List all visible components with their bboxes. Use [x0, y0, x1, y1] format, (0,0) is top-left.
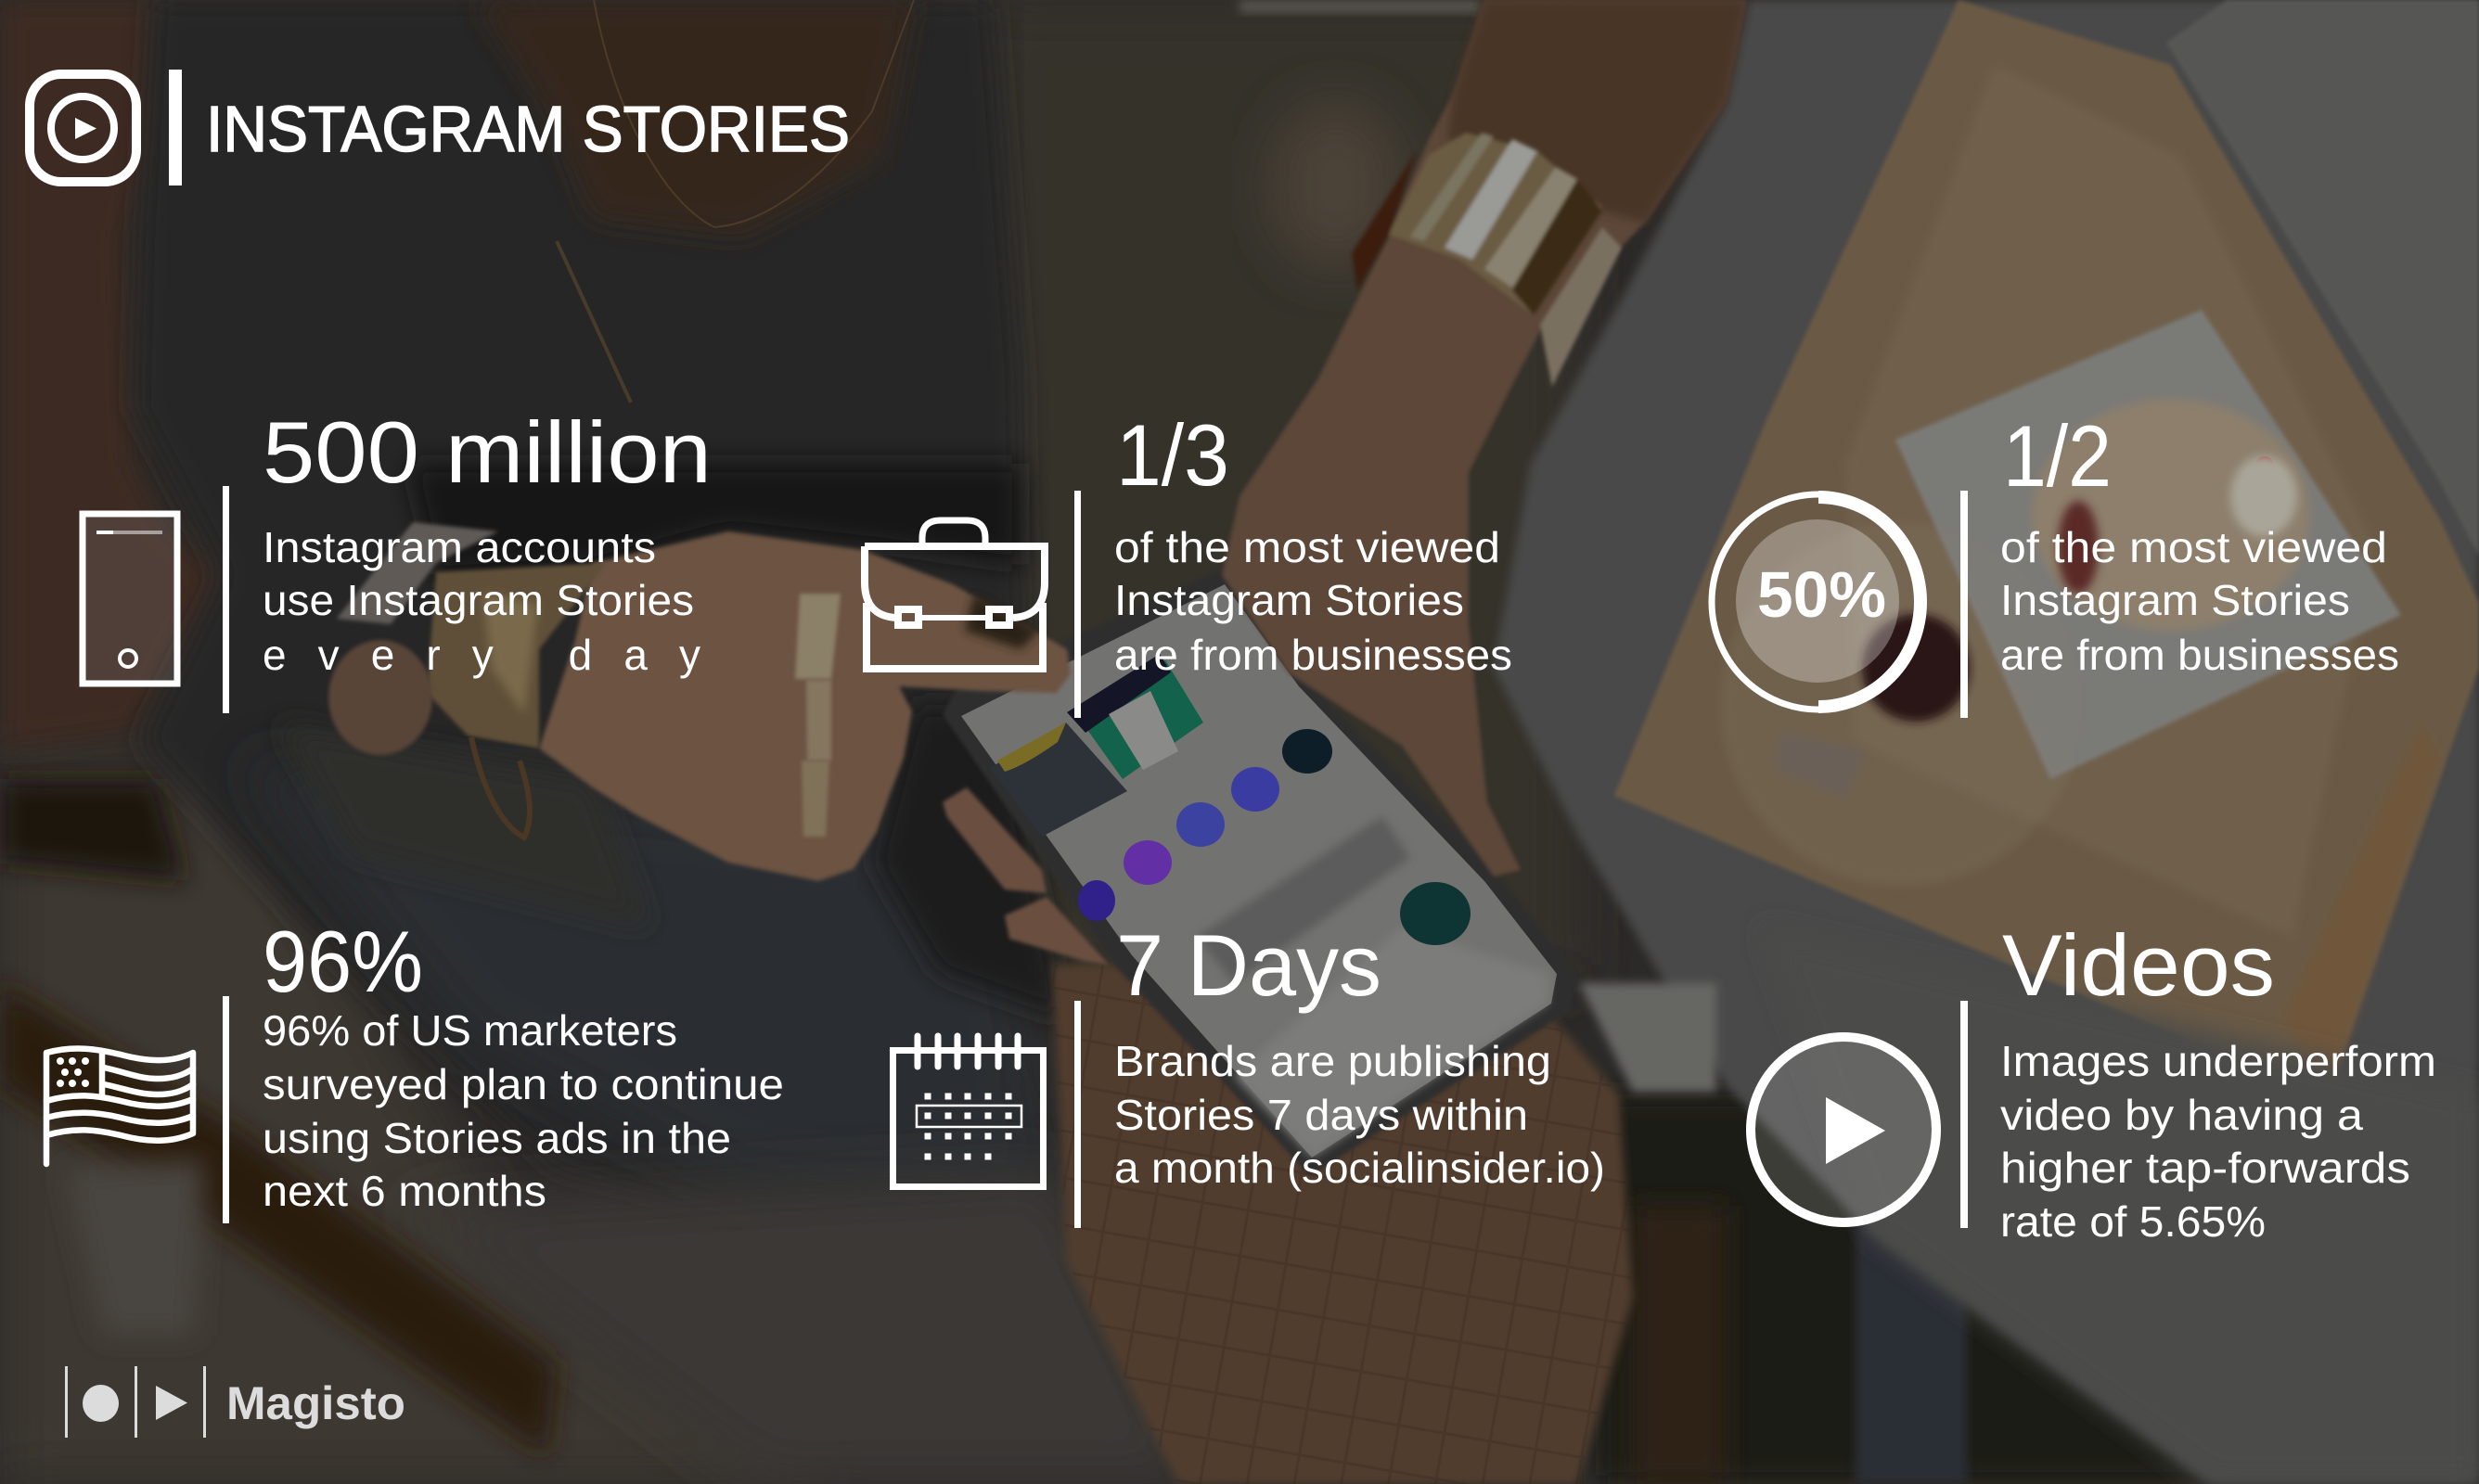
body text: Instagram Stories [1114, 576, 1464, 624]
panel: 1/2 [1712, 407, 2399, 718]
upper arm [0, 0, 223, 751]
fingers left of phone [943, 787, 1047, 893]
body text: using Stories ads in the [263, 1114, 731, 1162]
panel: 96% [46, 913, 784, 1223]
body text: are from businesses [2000, 631, 2399, 679]
body text [263, 1006, 784, 1215]
watch strap [337, 522, 498, 624]
fist with thumb [539, 531, 1071, 881]
phone body [943, 568, 1575, 1176]
body text: 96% of US marketers [263, 1006, 677, 1055]
body text [1114, 523, 1512, 679]
divider [223, 996, 229, 1223]
pale cushion [65, 1159, 204, 1336]
dark patch left [0, 779, 186, 881]
body text: Instagram Stories [2000, 576, 2350, 624]
phone screen [961, 584, 1557, 1158]
tank top [135, 7, 1026, 999]
panel: 1/3 [865, 406, 1512, 718]
body text: next 6 months [263, 1167, 546, 1215]
divider [1074, 1001, 1081, 1228]
table [1494, 0, 2479, 1484]
napkin [1895, 310, 2401, 779]
body text [1114, 1037, 1605, 1192]
body text: surveyed plan to continue [263, 1060, 784, 1108]
heading: Videos: Videos [2002, 916, 2275, 1014]
body text: Stories 7 days within [1114, 1091, 1528, 1139]
dark shadow band around fist [408, 464, 1021, 575]
icon: briefcase [865, 520, 1045, 669]
donut chart: 50%: 50% [1757, 558, 1886, 631]
diagonal dark wood [0, 983, 557, 1456]
panel: 7 Days [893, 916, 1605, 1228]
body text: every day [263, 631, 700, 679]
heading: 500 million: 500 million [263, 403, 712, 501]
body text: are from businesses [1114, 631, 1512, 679]
body text: a month (socialinsider.io) [1114, 1144, 1605, 1192]
gold bangle [427, 563, 607, 748]
leg with fishnet [1052, 965, 1633, 1484]
body text: Instagram accounts [263, 523, 656, 571]
screen story thumbnails [990, 723, 1127, 837]
divider [1074, 491, 1081, 718]
donut chart: 50% [1712, 494, 1920, 710]
body text [2000, 523, 2399, 679]
body text: rate of 5.65% [2000, 1197, 2266, 1246]
heading: 96%: 96% [263, 913, 423, 1010]
bottom-left cushion [0, 758, 728, 1484]
necklace [557, 0, 914, 403]
dark lower right floor [1596, 1094, 2479, 1484]
watch face [328, 640, 432, 755]
heading divider [169, 70, 182, 186]
tray [1614, 0, 2479, 1099]
distant floor, top centre [1009, 24, 1561, 955]
icon: phone [83, 514, 177, 684]
paper stack right [2166, 0, 2479, 556]
rings [795, 594, 841, 679]
Magisto logo [65, 1366, 405, 1438]
body text: video by having a [2000, 1091, 2363, 1139]
gold cuff [1352, 133, 1622, 387]
body text [2000, 1037, 2436, 1246]
bottom fabric [499, 1165, 1166, 1484]
body text: Brands are publishing [1114, 1037, 1551, 1085]
body text: higher tap-forwards [2000, 1144, 2410, 1192]
divider [1960, 1001, 1968, 1228]
heading: 1/3: 1/3 [1116, 406, 1229, 504]
table edge highlight [1579, 983, 1716, 1092]
chest [474, 0, 914, 237]
body text: of the most viewed [1114, 523, 1500, 571]
divider [223, 486, 229, 713]
title: INSTAGRAM STORIES [206, 93, 850, 165]
pastry [2032, 399, 2310, 631]
icon: play button [1751, 1037, 1936, 1222]
logo icon: rounded square with play circle [30, 74, 136, 182]
panel: 500 million [83, 403, 712, 713]
body text: of the most viewed [2000, 523, 2387, 571]
icon: US flag [46, 1049, 193, 1164]
table lower shading [1763, 928, 2479, 1484]
screen text block [1197, 816, 1410, 983]
screen story circles [1282, 729, 1332, 774]
panel: Videos [1751, 916, 2436, 1246]
heading: 1/2: 1/2 [2003, 407, 2112, 505]
body text [263, 523, 700, 679]
right forearm, palm and thumb [1222, 0, 1746, 876]
body text: Images underperform [2000, 1037, 2436, 1085]
body text: use Instagram Stories [263, 576, 694, 624]
bracelet chain [471, 737, 530, 838]
divider [1960, 491, 1968, 718]
glass and coffee [1721, 524, 2083, 886]
icon: calendar [893, 1036, 1043, 1187]
Magisto logo: Magisto [226, 1377, 405, 1429]
heading: 7 Days: 7 Days [1116, 916, 1381, 1014]
